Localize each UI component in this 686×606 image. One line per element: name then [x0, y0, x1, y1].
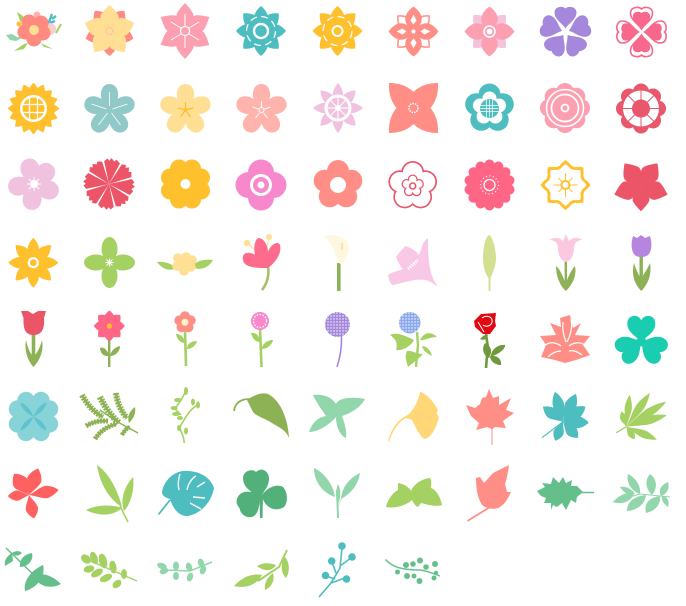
icon: coral four point flower	[389, 83, 438, 133]
icon: green oak leaf	[537, 477, 594, 510]
icon: coral flower with stem	[174, 311, 197, 366]
icon: yellow outline flower	[540, 160, 590, 210]
icon: purple heart flower	[538, 7, 593, 59]
icon: mint sprig	[156, 558, 212, 582]
icon: coral lobed flower	[314, 160, 362, 207]
icon: bouquet	[6, 12, 61, 51]
icon: red tulip	[21, 311, 46, 367]
icon: yellow and coral flower	[82, 5, 137, 57]
icon: teal monstera leaf	[158, 471, 214, 516]
icon: green four petal flower	[84, 237, 135, 288]
icon: coral maple leaf	[466, 389, 514, 445]
icon: purple tulip	[632, 235, 651, 291]
icon: pink six petal flower	[156, 3, 214, 59]
icon: mint compound leaf	[613, 474, 670, 513]
icon: red lily with stem	[243, 234, 280, 290]
icon: red outline lobed flower	[388, 161, 437, 208]
icon: red leaf	[8, 466, 60, 520]
icon: pink lily with leaves	[549, 234, 583, 291]
icon: pink wavy rings flower	[540, 83, 590, 133]
icon: teal five petal flower	[82, 84, 137, 136]
icon: teal palmate leaf	[540, 390, 589, 443]
icon: teal star flower	[236, 6, 286, 56]
icon: green vine	[170, 387, 200, 443]
icon: yellow lobed flower	[161, 160, 210, 208]
icon: peach five petal flower	[234, 84, 289, 136]
icon: green leaf	[234, 393, 289, 438]
icon: yellow star flower	[312, 6, 362, 56]
icon: red rose	[474, 313, 505, 368]
icon: yellow daisy	[8, 238, 58, 288]
icon: mint sprout	[314, 468, 360, 518]
icon: teal berry branch	[319, 542, 356, 597]
icon: pink trumpet lily	[388, 238, 438, 287]
icon: red carnation	[82, 157, 136, 211]
icon: pink heart clover	[617, 7, 666, 57]
icon: pink gerbera	[463, 159, 516, 211]
icon: coral four petal flower	[388, 6, 438, 56]
icon: purple allium	[325, 312, 350, 367]
icon: coral lotus	[540, 315, 590, 363]
icon: red scalloped flower	[616, 84, 666, 134]
icon: mint butterfly leaf	[309, 395, 365, 438]
icon: green bud	[483, 235, 496, 291]
icon: bamboo leaves	[86, 465, 133, 522]
icon: yellow green branch	[234, 550, 289, 590]
icon: green palm leaf	[616, 391, 668, 443]
icon: blue hydrangea	[390, 312, 437, 367]
icon: green butterfly leaves	[386, 478, 442, 508]
icon: green shamrock	[237, 470, 287, 518]
icon: teal four leaf clover	[9, 392, 58, 441]
icon: calla lily	[324, 235, 349, 291]
icon: lilac wheel flower	[313, 83, 363, 133]
icon: teal trefoil	[612, 316, 670, 366]
icon: pink dahlia with stem	[251, 313, 273, 367]
icon: red five point flower	[611, 158, 671, 211]
icon: coral maple leaf two	[468, 465, 511, 521]
icon: green berry branch	[386, 558, 440, 584]
icon: teal lobed flower	[465, 84, 514, 131]
icon: green sprig	[5, 548, 61, 591]
icon: green fern	[82, 393, 138, 439]
icon: sunflower	[8, 83, 59, 134]
icon: yellow flower with leaves	[157, 252, 213, 276]
icon: yellow five petal flower	[158, 84, 213, 136]
icon: pink four petal flower	[464, 6, 514, 56]
icon: pink four lobe flower	[236, 160, 286, 210]
icon: lilac blossom	[7, 156, 62, 211]
icon: pink star flower with stem	[94, 310, 125, 367]
icon: yellow ginkgo leaf	[388, 392, 439, 442]
icon: green leafy branch	[79, 551, 137, 590]
